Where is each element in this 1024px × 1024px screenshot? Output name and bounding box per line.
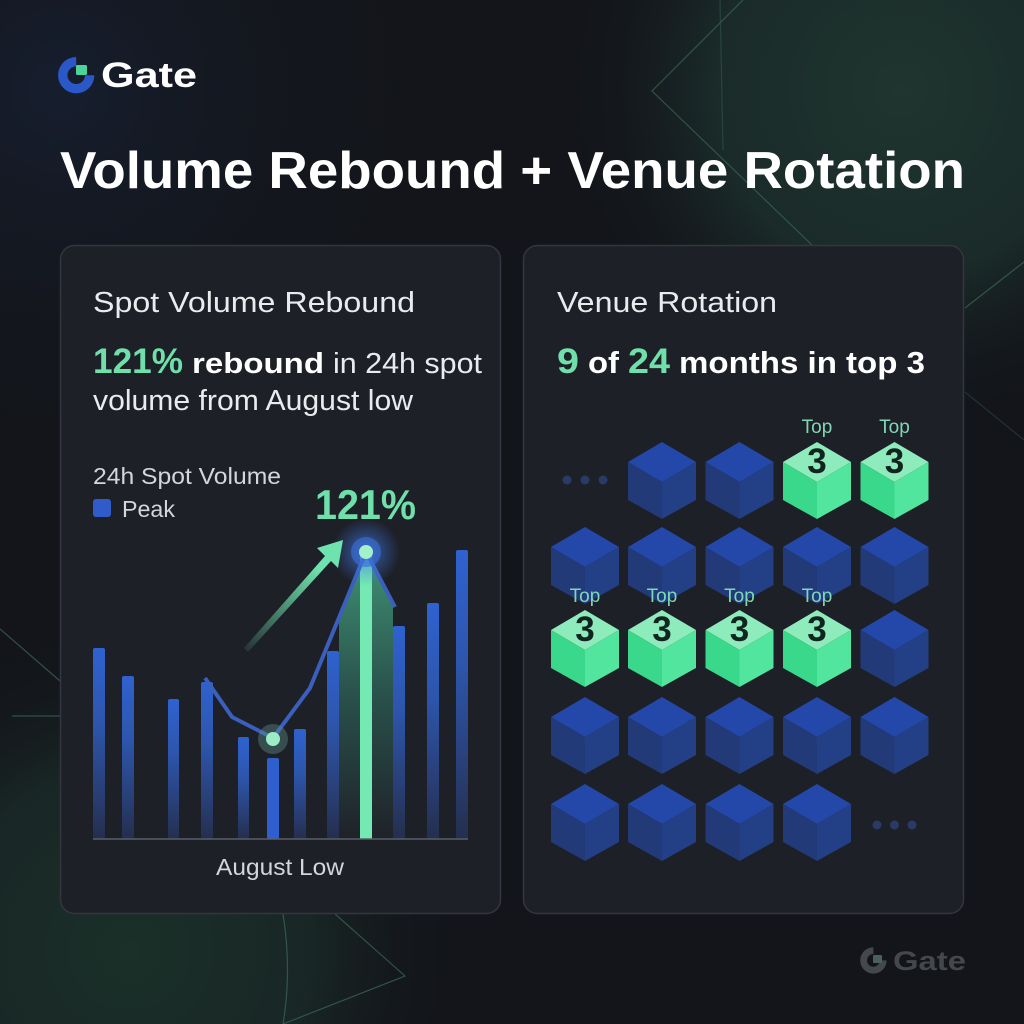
panel: spot volume rebound [60, 246, 500, 914]
chart legend: 24h Spot Volume [93, 463, 281, 489]
top labels: Top [570, 586, 600, 607]
row 5 cubes [551, 784, 851, 861]
chart legend: Peak [122, 496, 175, 522]
statement: of [588, 345, 620, 380]
cube numbers: 3 [730, 610, 749, 649]
top labels: Top [724, 586, 755, 607]
panel: venue rotation [524, 246, 964, 914]
logo: Gate watermark [860, 946, 966, 976]
panel heading: Spot Volume Rebound [93, 287, 415, 319]
top labels: Top [802, 586, 832, 607]
row 2 cubes [551, 527, 928, 604]
ellipsis: earlier months [562, 476, 608, 484]
icon: Gate logo mark [58, 57, 94, 93]
top labels: Top [647, 586, 677, 607]
cube numbers: 3 [885, 442, 904, 481]
rebound statement: rebound [192, 348, 324, 380]
marker: august low [258, 724, 288, 754]
logo: Gate top-left [58, 56, 197, 95]
row 3 cubes [551, 610, 928, 687]
statement: months in top 3 [679, 345, 925, 380]
watermark wordmark: Gate [893, 946, 966, 976]
rebound statement: in 24h spot [333, 348, 482, 380]
peak bar [360, 552, 372, 839]
callout: 121%: 121% [315, 481, 416, 528]
row 4 cubes [551, 697, 928, 774]
title: Volume Rebound + Venue Rotation [60, 142, 965, 200]
top labels: Top [879, 417, 910, 438]
cube grid [551, 417, 928, 861]
rebound statement: volume from August low [93, 385, 414, 417]
statement: 24 [628, 342, 671, 381]
cube numbers: 3 [807, 610, 827, 649]
statement [557, 342, 925, 381]
top labels [570, 417, 910, 607]
logo wordmark: Gate [101, 56, 197, 95]
bar chart [93, 550, 468, 839]
trend line [205, 552, 395, 738]
marker: peak [332, 518, 400, 586]
arrow: rebound [244, 540, 343, 652]
top labels: Top [802, 417, 832, 438]
ellipsis: later months [872, 820, 916, 830]
rebound statement: 121% [93, 342, 183, 381]
cube numbers: 3 [652, 610, 672, 649]
statement: 9 [557, 342, 579, 381]
chart legend [93, 463, 281, 522]
cube numbers: 3 [807, 442, 827, 481]
row 1 cubes [628, 442, 928, 519]
panel heading: Venue Rotation [557, 287, 777, 319]
cube numbers [575, 442, 904, 649]
icon: Gate watermark mark [860, 947, 887, 974]
axis label: August Low [216, 854, 344, 880]
rebound statement [93, 342, 482, 417]
cube numbers: 3 [575, 610, 595, 649]
